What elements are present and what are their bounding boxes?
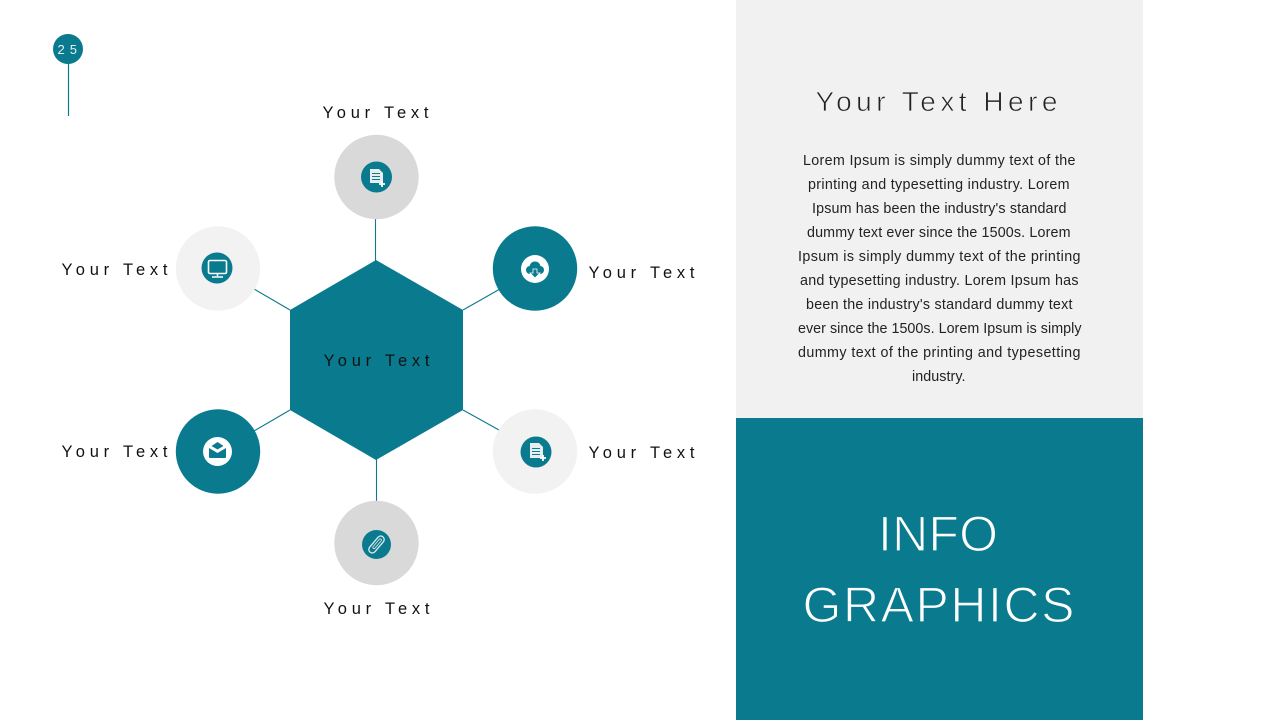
icon: monitor (208, 260, 226, 277)
node: lower right, document add: Your Text (588, 444, 695, 462)
panel: text (736, 0, 1143, 418)
body paragraph: ever since the 1500s. Lorem Ipsum is simply (798, 321, 1082, 337)
page number marker (53, 34, 83, 116)
node: upper left, monitor (62, 226, 260, 311)
node: lower left, envelope: Your Text (62, 443, 168, 461)
node: top, document add (322, 104, 429, 219)
connector lines (254, 215, 500, 505)
node: lower right, document add (493, 409, 695, 494)
body paragraph: printing and typesetting industry. Lorem (808, 177, 1070, 193)
icon: document with plus (370, 169, 385, 187)
central hexagon (290, 260, 463, 460)
body paragraph: and typesetting industry. Lorem Ipsum has (800, 273, 1078, 289)
node: upper left, monitor: Your Text (62, 261, 168, 279)
title text (802, 506, 1074, 633)
title text: INFO (878, 506, 998, 562)
body paragraph: been the industry's standard dummy text (806, 297, 1073, 313)
body paragraph: industry. (912, 369, 966, 385)
central hexagon: Your Text (324, 352, 430, 370)
icon: open envelope (209, 442, 226, 458)
body paragraph: dummy text of the printing and typesetting (798, 345, 1081, 361)
body paragraph: Ipsum is simply dummy text of the printing (798, 249, 1081, 265)
heading: Your Text Here (816, 86, 1058, 117)
node: top, document add: Your Text (322, 104, 429, 122)
body paragraph (798, 153, 1082, 385)
body paragraph: Lorem Ipsum is simply dummy text of the (803, 153, 1076, 169)
page number marker: 25 (58, 42, 77, 57)
body paragraph: dummy text ever since the 1500s. Lorem (807, 225, 1070, 241)
icon: document with plus (530, 443, 546, 461)
title text: GRAPHICS (802, 577, 1074, 633)
node: bottom, paperclip: Your Text (324, 600, 430, 618)
node: upper right, cloud download (493, 226, 695, 311)
node: bottom, paperclip (324, 501, 430, 618)
node: upper right, cloud download: Your Text (588, 264, 695, 282)
panel: title (736, 418, 1143, 720)
node: lower left, envelope (62, 409, 260, 494)
icon: paperclip (367, 535, 386, 554)
body paragraph: Ipsum has been the industry's standard (812, 201, 1067, 217)
icon: cloud download (526, 262, 544, 278)
